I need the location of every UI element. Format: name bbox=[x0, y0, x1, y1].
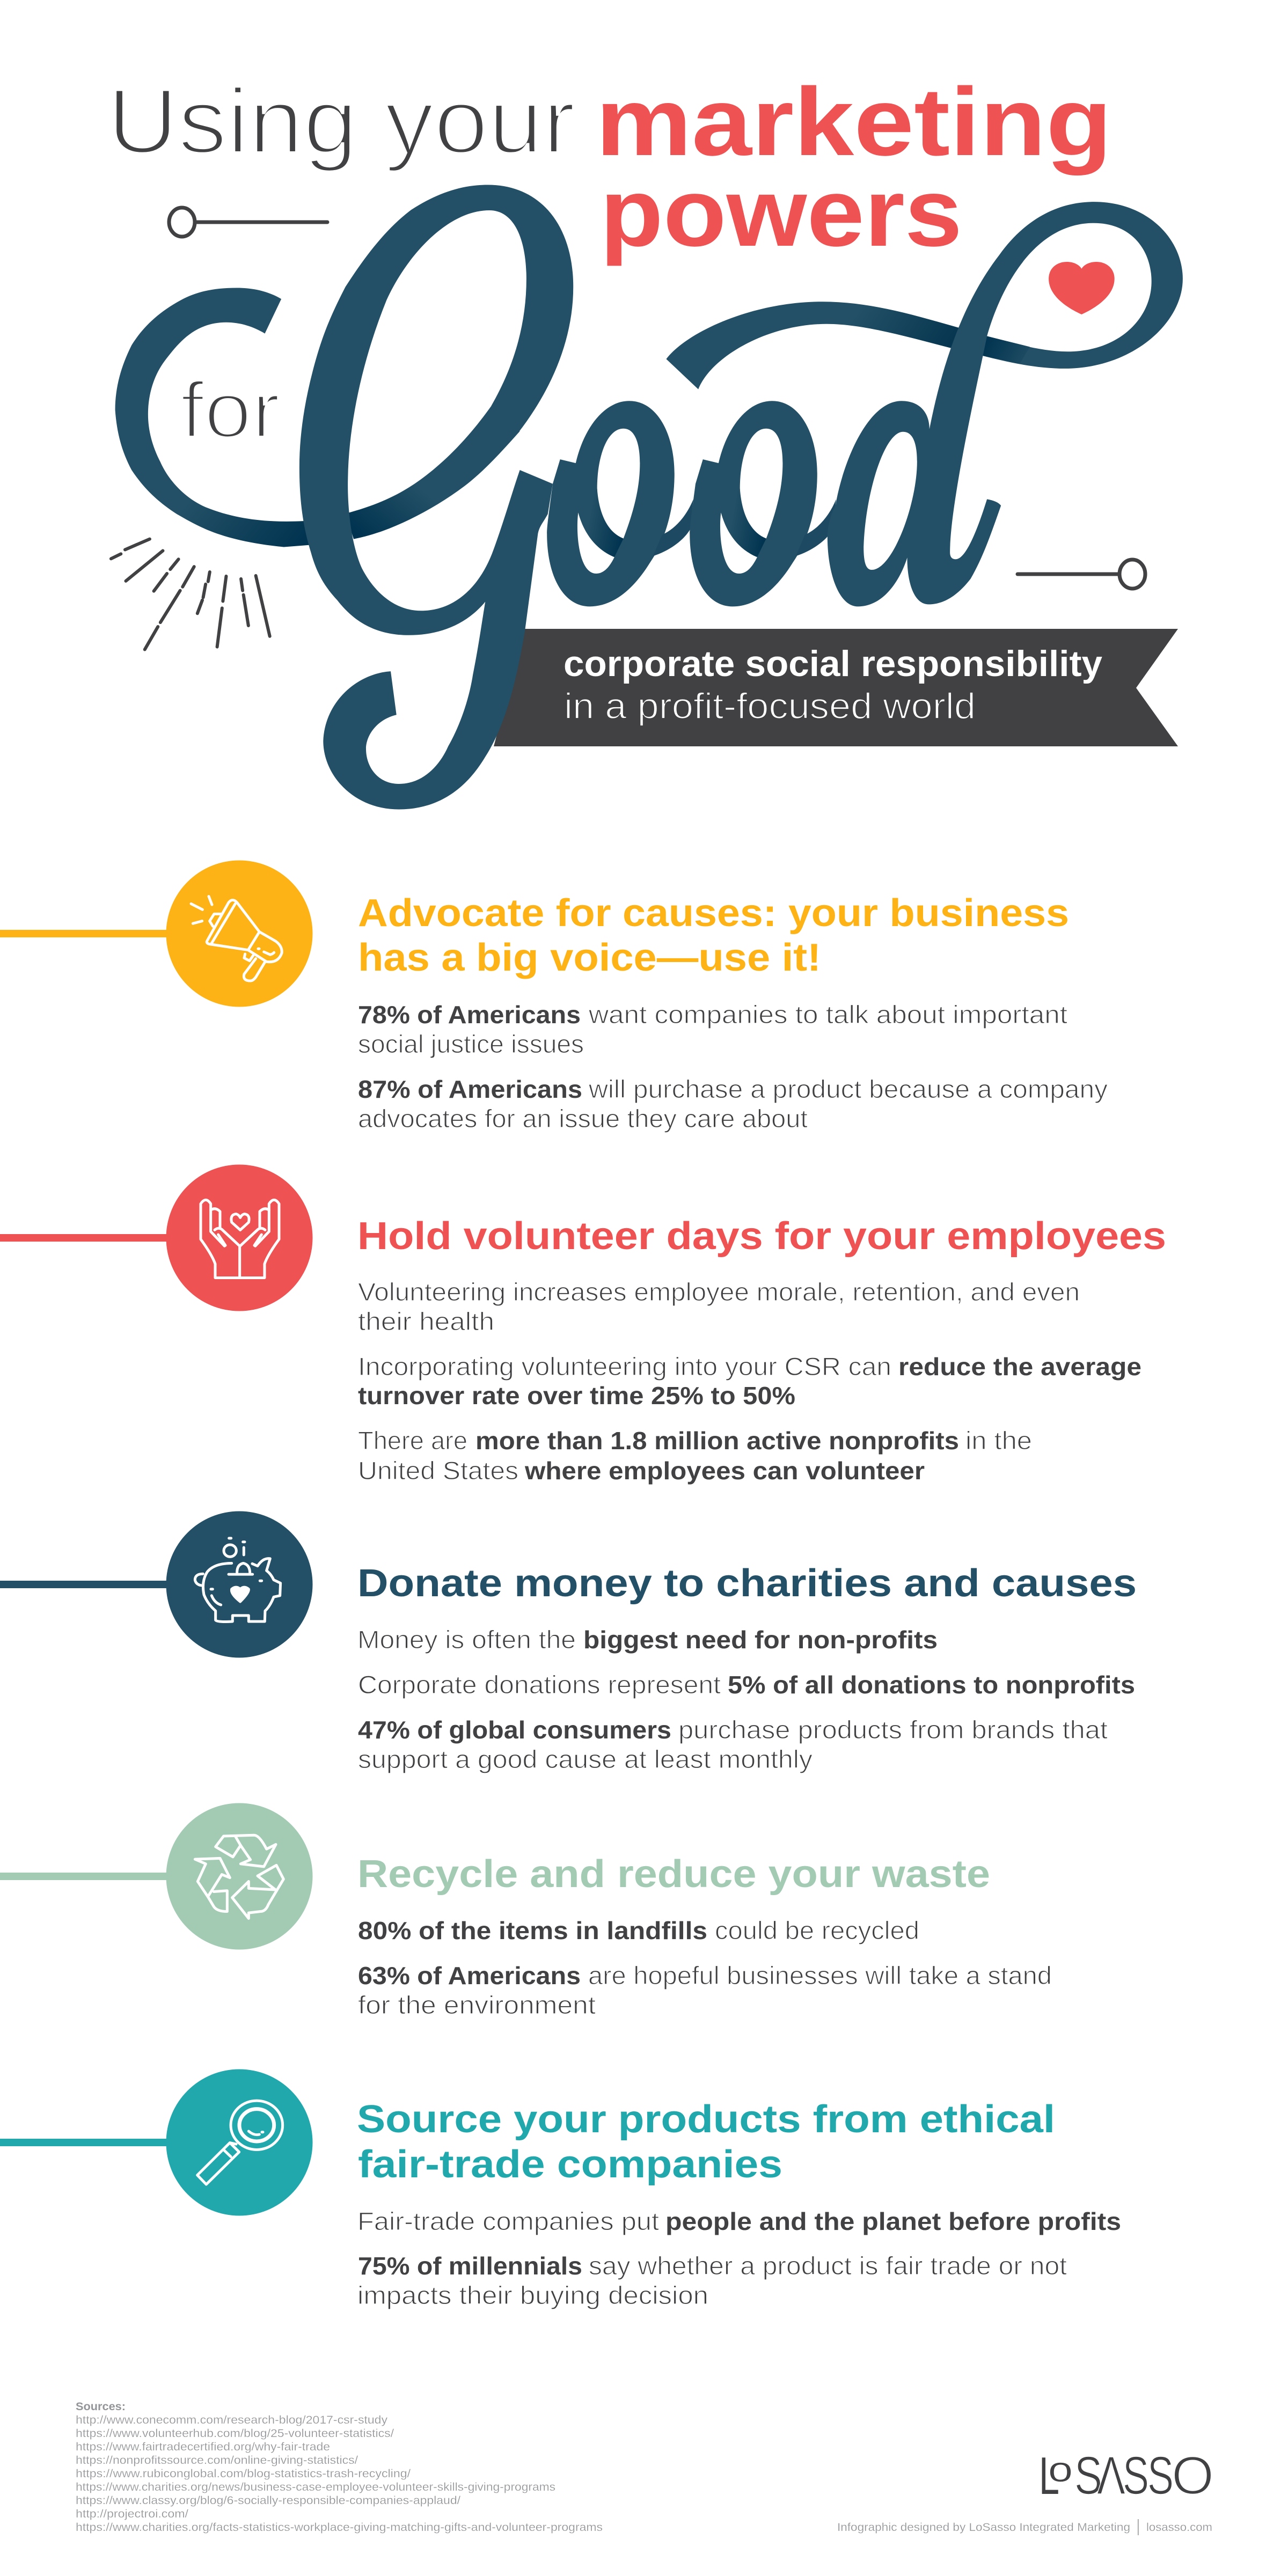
swash: lower return bbox=[346, 406, 520, 539]
banner: corporate social responsibility: in a profit-focused world bbox=[564, 686, 976, 726]
icon: recycling arrows bbox=[195, 1835, 283, 1918]
heading: Recycle and reduce your waste bbox=[357, 1853, 990, 1896]
icon: circle badge bbox=[166, 1164, 312, 1311]
icon: megaphone bbox=[191, 897, 282, 981]
swash: upper ribbon bbox=[666, 302, 962, 390]
stat text bbox=[357, 1625, 1135, 1773]
connector line bbox=[0, 1873, 172, 1880]
logo: LoSasso: S bbox=[1123, 2446, 1149, 2506]
footer credit bbox=[837, 2519, 1212, 2535]
section 4: recycle bbox=[0, 1803, 1052, 2019]
footer credit: Infographic designed by LoSasso Integrated Marketing bbox=[837, 2521, 1130, 2534]
section 2: hold volunteer days bbox=[0, 1164, 1166, 1485]
pin: right bbox=[1018, 560, 1145, 589]
stat text: Incorporating volunteering into your CSR can bbox=[358, 1352, 891, 1381]
heading: Source your products from ethical bbox=[357, 2098, 1055, 2141]
icon: magnifying glass bbox=[197, 2101, 283, 2184]
script lettering: Good bbox=[115, 185, 1183, 809]
connector line bbox=[0, 1581, 172, 1588]
stat text: want companies to talk about important bbox=[588, 1000, 1067, 1029]
sources: https://www.charities.org/news/business-case-employee-volunteer-skills-giving-programs bbox=[76, 2481, 555, 2493]
sources: https://www.fairtradecertified.org/why-fair-trade bbox=[76, 2441, 330, 2453]
word: for: for bbox=[180, 366, 280, 454]
sources: https://www.volunteerhub.com/blog/25-volunteer-statistics/ bbox=[76, 2427, 394, 2440]
section 1: advocate for causes: has a big voice—use it! bbox=[358, 936, 821, 979]
title: using your marketing powers: Using your bbox=[107, 70, 575, 173]
sources: Sources: bbox=[76, 2401, 126, 2413]
sources bbox=[76, 2401, 603, 2534]
sources: https://nonprofitssource.com/online-giving-statistics/ bbox=[76, 2454, 358, 2467]
stat text: their health bbox=[358, 1307, 494, 1335]
logo: LoSasso bbox=[1039, 2446, 1214, 2506]
stat text: impacts their buying decision bbox=[357, 2281, 708, 2309]
stat text: There are bbox=[358, 1426, 467, 1455]
swash: loop shading bbox=[983, 336, 1030, 364]
stat text: where employees can volunteer bbox=[524, 1457, 925, 1485]
logo: LoSasso: O bbox=[1172, 2446, 1214, 2506]
stat text: Fair-trade companies put bbox=[357, 2207, 659, 2235]
stat text: biggest need for non-profits bbox=[583, 1626, 938, 1654]
letter o two bbox=[690, 401, 836, 606]
stat text: advocates for an issue they care about bbox=[358, 1104, 808, 1133]
stat text bbox=[357, 2207, 1121, 2309]
stat text: 5% of all donations to nonprofits bbox=[728, 1671, 1135, 1699]
connector line bbox=[0, 930, 172, 937]
stat text: 47% of global consumers bbox=[358, 1716, 671, 1744]
icon: hands and heart bbox=[201, 1200, 279, 1278]
logo: LoSasso: Λ bbox=[1097, 2446, 1125, 2506]
stat text: are hopeful businesses will take a stand bbox=[588, 1961, 1052, 1990]
icon: heart bbox=[1049, 262, 1115, 314]
sources: http://projectroi.com/ bbox=[76, 2508, 188, 2520]
swash: left curl bbox=[115, 288, 311, 547]
connector line bbox=[0, 2139, 172, 2146]
stat text: reduce the average bbox=[898, 1353, 1141, 1381]
stat text: turnover rate over time 25% to 50% bbox=[358, 1382, 795, 1410]
stat text: for the environment bbox=[358, 1991, 596, 2019]
stat text: Volunteering increases employee morale, retention, and even bbox=[358, 1278, 1080, 1306]
icon: piggy bank bbox=[195, 1538, 281, 1622]
sources: http://www.conecomm.com/research-blog/2017-csr-study bbox=[76, 2414, 388, 2426]
stat text: say whether a product is fair trade or not bbox=[589, 2251, 1067, 2280]
stat text bbox=[358, 1916, 1052, 2019]
burst rays bbox=[111, 539, 270, 650]
stat text bbox=[358, 1278, 1141, 1485]
section 1: advocate for causes bbox=[0, 861, 1108, 1133]
heading: Donate money to charities and causes bbox=[357, 1562, 1137, 1605]
letter d with top loop bbox=[828, 202, 1183, 606]
icon: circle badge bbox=[166, 861, 312, 1007]
stat text: support a good cause at least monthly bbox=[358, 1745, 813, 1773]
stat text: 87% of Americans bbox=[358, 1075, 582, 1103]
icon: circle badge bbox=[166, 1511, 312, 1658]
section 5: source ethical products: fair-trade companies bbox=[358, 2143, 782, 2186]
section 3: donate money bbox=[0, 1511, 1137, 1773]
icon: circle badge bbox=[166, 2069, 312, 2216]
stat text: people and the planet before profits bbox=[665, 2207, 1121, 2235]
stat text: Money is often the bbox=[357, 1625, 576, 1654]
stat text: could be recycled bbox=[715, 1916, 919, 1944]
stat text: in the bbox=[965, 1426, 1032, 1455]
logo: LoSasso: L bbox=[1039, 2446, 1059, 2505]
icon: circle badge bbox=[166, 1803, 312, 1950]
banner: corporate social responsibility: corporate social responsibility bbox=[564, 643, 1102, 684]
footer credit: losasso.com bbox=[1146, 2521, 1212, 2534]
stat text: 63% of Americans bbox=[358, 1962, 581, 1990]
letter G bbox=[299, 185, 573, 809]
title: using your marketing powers: powers bbox=[600, 159, 962, 267]
stat text bbox=[358, 1000, 1108, 1133]
logo: LoSasso: S bbox=[1147, 2446, 1174, 2506]
title: using your marketing powers bbox=[107, 68, 1112, 267]
banner: corporate social responsibility bbox=[494, 629, 1178, 746]
sources: https://www.rubiconglobal.com/blog-statistics-trash-recycling/ bbox=[76, 2468, 411, 2480]
stat text: United States bbox=[358, 1456, 518, 1485]
stat text: purchase products from brands that bbox=[678, 1715, 1108, 1744]
heading: Advocate for causes: your business bbox=[358, 892, 1069, 935]
letter o one bbox=[547, 401, 693, 606]
stat text: Corporate donations represent bbox=[358, 1670, 721, 1699]
stat text: will purchase a product because a company bbox=[588, 1075, 1108, 1103]
logo: LoSasso: o bbox=[1048, 2449, 1073, 2489]
stat text: 78% of Americans bbox=[358, 1001, 581, 1029]
stat text: more than 1.8 million active nonprofits bbox=[475, 1427, 959, 1455]
connector line bbox=[0, 1234, 172, 1242]
stat text: 75% of millennials bbox=[358, 2252, 582, 2280]
stat text: social justice issues bbox=[358, 1030, 584, 1058]
logo: LoSasso: S bbox=[1074, 2446, 1102, 2506]
stat text: 80% of the items in landfills bbox=[358, 1917, 707, 1944]
section 5: source ethical products bbox=[0, 2069, 1121, 2309]
sources: https://www.charities.org/facts-statistics-workplace-giving-matching-gifts-and-volunteer-programs bbox=[76, 2521, 603, 2534]
heading: Hold volunteer days for your employees bbox=[357, 1215, 1166, 1258]
title: using your marketing powers: marketing bbox=[596, 68, 1112, 176]
sources: https://www.classy.org/blog/6-socially-responsible-companies-applaud/ bbox=[76, 2494, 460, 2507]
pin: left bbox=[169, 208, 327, 237]
